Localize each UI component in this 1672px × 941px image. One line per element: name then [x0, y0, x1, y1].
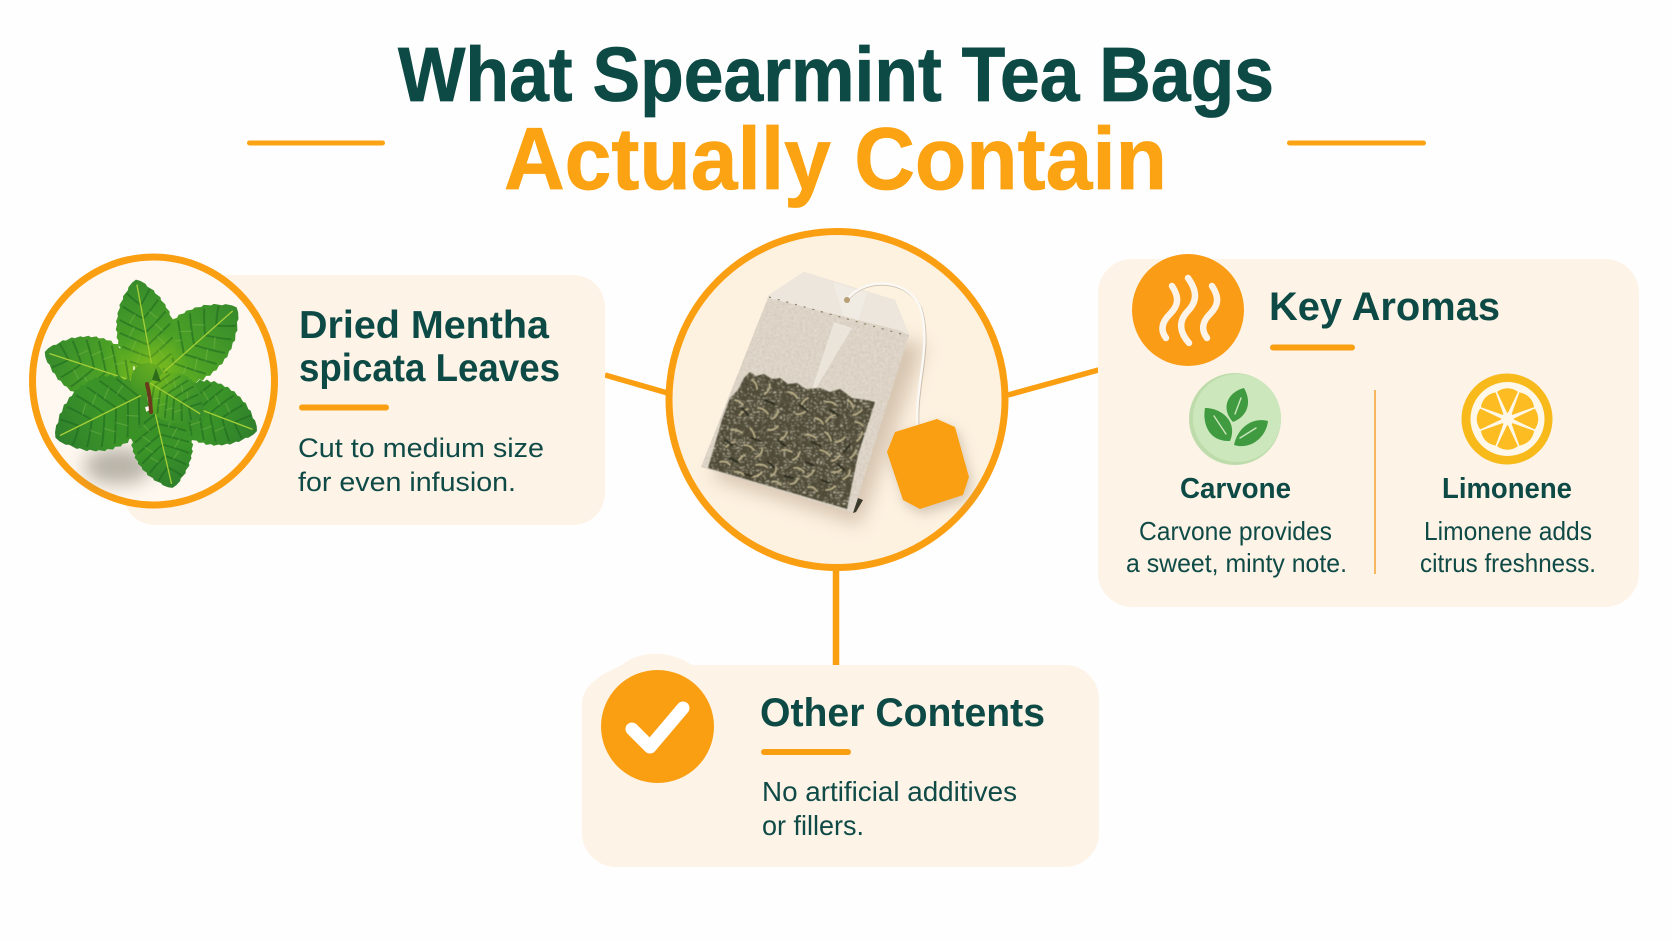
limonene description line 2: citrus freshness. [1420, 548, 1596, 578]
panel: dried leaves [32, 257, 605, 525]
icon: mint sprig [32, 257, 274, 505]
underline [761, 749, 851, 755]
panel background [123, 275, 605, 525]
heading: Dried Mentha [299, 304, 549, 347]
panel: key aromas [1098, 254, 1639, 607]
panel background [1098, 259, 1639, 607]
connector: tea bag to other contents [833, 570, 839, 665]
title line 1: What Spearmint Tea Bags [398, 32, 1274, 118]
panel: other contents [582, 654, 1099, 867]
carvone description: Carvone provides [1139, 516, 1332, 546]
title rule right [1287, 140, 1426, 146]
icon: lemon slice [1462, 374, 1552, 464]
connector: tea bag to aromas [1008, 369, 1102, 395]
carvone name: Carvone [1180, 473, 1291, 505]
limonene description: Limonene adds [1424, 516, 1592, 546]
panel background [582, 654, 1099, 867]
center circle: tea bag [669, 232, 1005, 568]
title [247, 32, 1426, 208]
icon: carvone leaves [1189, 373, 1281, 465]
icon: check mark [601, 670, 714, 783]
carvone description line 2: a sweet, minty note. [1126, 548, 1347, 578]
underline [1270, 344, 1355, 350]
title line 2: Actually Contain [504, 109, 1167, 208]
heading: Other Contents [760, 691, 1045, 735]
heading: Key Aromas [1269, 285, 1500, 329]
description: No artificial additives [762, 776, 1017, 807]
icon: aroma waves [1132, 254, 1244, 366]
description line 2: for even infusion. [298, 467, 516, 497]
connector: leaves to tea bag [605, 375, 671, 394]
description: Cut to medium size [298, 433, 544, 463]
underline [299, 404, 389, 410]
limonene name: Limonene [1442, 473, 1572, 505]
title rule left [247, 140, 385, 146]
heading line 2: spicata Leaves [299, 347, 560, 390]
description line 2: or fillers. [762, 810, 864, 841]
icon: tea bag [701, 272, 972, 525]
tea bag tag [887, 419, 969, 509]
divider [1374, 390, 1376, 574]
circle background [669, 232, 1005, 568]
